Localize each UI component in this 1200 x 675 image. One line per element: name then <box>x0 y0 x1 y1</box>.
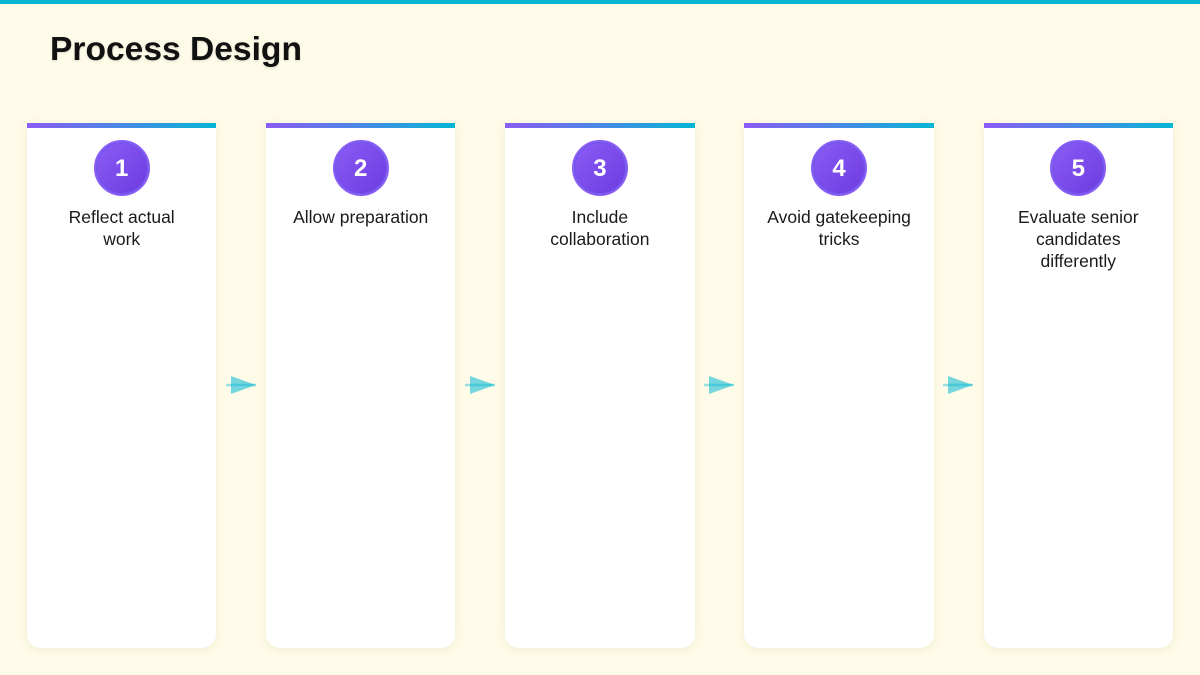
step 1 number badge <box>94 140 150 196</box>
step 1 gradient bar <box>27 123 216 128</box>
step 5 number badge <box>1050 140 1106 196</box>
step 3 text: collaboration <box>550 228 650 248</box>
step 3 text <box>550 206 650 248</box>
step 5 text: differently <box>1040 250 1116 270</box>
step 4 gradient bar <box>744 123 934 128</box>
arrow 3 to 4 <box>704 376 734 394</box>
step 4 text <box>767 206 911 248</box>
step 1 text <box>69 206 175 248</box>
panel: step 3 <box>505 123 695 648</box>
step 4 number badge: 4 <box>832 155 846 182</box>
arrow 1 to 2 <box>226 376 256 394</box>
title: Process Design <box>50 31 302 68</box>
step 5 text: candidates <box>1036 228 1121 248</box>
arrow 4 to 5 <box>943 376 973 394</box>
step 1 text: Reflect actual <box>69 206 175 226</box>
step 2 gradient bar <box>266 123 455 128</box>
panel: step 2 <box>266 123 455 648</box>
step 3 gradient bar <box>505 123 695 128</box>
panel: step 5 <box>984 123 1173 648</box>
step 5 number badge: 5 <box>1072 155 1085 182</box>
step 1 text: work <box>103 228 140 248</box>
panel: step 4 <box>744 123 934 648</box>
step 2 text: Allow preparation <box>293 206 428 226</box>
step 5 gradient bar <box>984 123 1173 128</box>
step 1 number badge: 1 <box>115 155 128 182</box>
step 4 text: Avoid gatekeeping <box>767 206 911 226</box>
top accent bar <box>0 0 1200 4</box>
panel: step 1 <box>27 123 216 648</box>
step 5 text: Evaluate senior <box>1018 206 1139 226</box>
step 3 text: Include <box>572 206 628 226</box>
step 4 number badge <box>811 140 867 196</box>
step 2 number badge <box>333 140 389 196</box>
step 4 text: tricks <box>819 228 860 248</box>
step 3 number badge: 3 <box>593 155 607 182</box>
arrow 2 to 3 <box>465 376 495 394</box>
step 5 text <box>1018 206 1139 270</box>
step 2 number badge: 2 <box>354 155 367 182</box>
step 3 number badge <box>572 140 628 196</box>
